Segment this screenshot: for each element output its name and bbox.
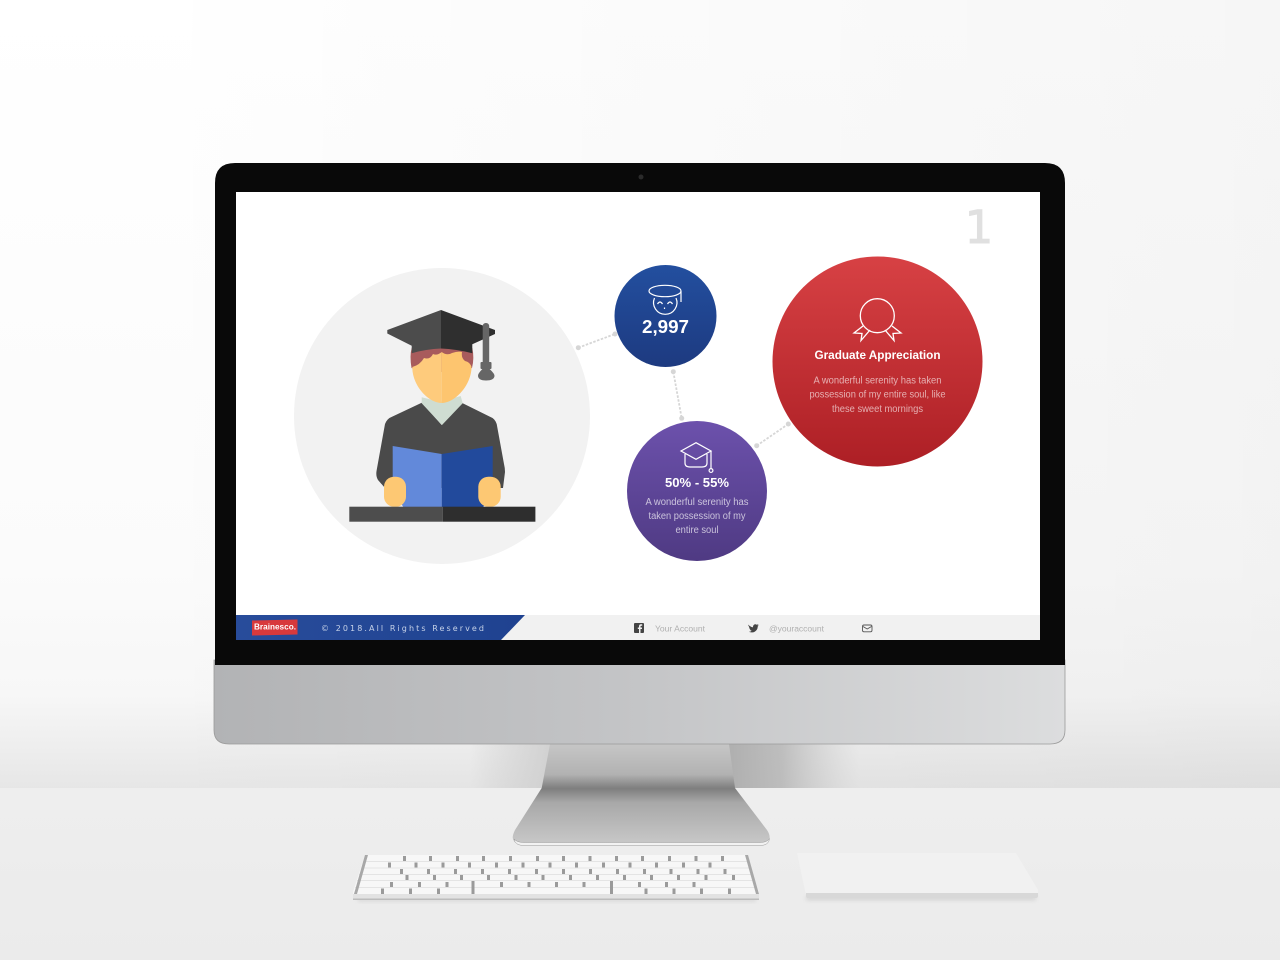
trackpad [797,853,1038,900]
panel: graduate appreciation [772,256,982,466]
lectern [349,507,535,522]
stat value: 2,997 [642,316,689,337]
connector: illustration to blue circle [576,332,618,350]
keyboard shadow [358,898,756,901]
tassel [478,323,494,380]
backdrop circle [294,268,590,564]
description: possession of my entire soul, like [810,390,946,400]
stat value: 50% - 55% [665,476,729,490]
wall shadow behind monitor stand [470,740,860,790]
icon: graduate head [649,285,681,314]
brand logo: Brainesco. [254,622,296,632]
graduate illustration [294,268,590,564]
monitor stand [513,744,770,846]
heading: Graduate Appreciation [814,348,940,362]
panel: percentage [627,421,767,561]
gown [376,403,505,488]
description: these sweet mornings [832,404,923,415]
connector: purple circle to red circle [754,422,791,448]
description: A wonderful serenity has taken [814,376,942,386]
purple circle [627,421,767,561]
footer background [236,615,1040,640]
monitor [214,163,1065,846]
footer bar [236,615,1040,640]
footer blue band [236,615,525,640]
copyright: © 2018.All Rights Reserved [321,624,484,633]
keyboard edges [354,855,759,894]
keyboard body [353,855,759,900]
description: A wonderful serenity has [646,497,748,508]
icon: award ribbon [854,299,901,340]
collar [422,396,463,425]
brand logo [252,620,298,636]
hair [411,348,473,372]
connector: blue circle to purple circle [671,369,684,421]
screen [236,192,1040,640]
webcam [638,174,644,180]
description: entire soul [676,525,718,536]
monitor chin [214,660,1065,744]
face [412,352,472,403]
panel: graduates count [614,265,716,367]
trackpad body [797,853,1038,897]
mortarboard cap [387,310,495,353]
blue circle [614,265,716,367]
trackpad edge [806,893,1038,898]
key gaps [381,856,735,894]
desk surface [0,788,1280,960]
description [810,376,946,415]
icon: facebook [634,623,644,633]
monitor bezel [215,163,1065,665]
description: taken possession of my [648,511,746,522]
icon: graduation cap [681,443,713,472]
left hand [384,477,406,507]
description [646,497,748,536]
keyboard front rim [353,894,759,900]
twitter handle: @youraccount [769,624,825,634]
account label: Your Account [655,624,706,634]
key row lines [355,862,756,888]
trackpad shadow [806,896,1036,900]
keyboard [353,855,759,901]
open book [393,446,493,507]
right hand [478,477,501,507]
icon: mail [862,625,872,632]
red circle [772,256,982,466]
icon: twitter [748,624,759,632]
slide number: 1 [965,201,993,254]
